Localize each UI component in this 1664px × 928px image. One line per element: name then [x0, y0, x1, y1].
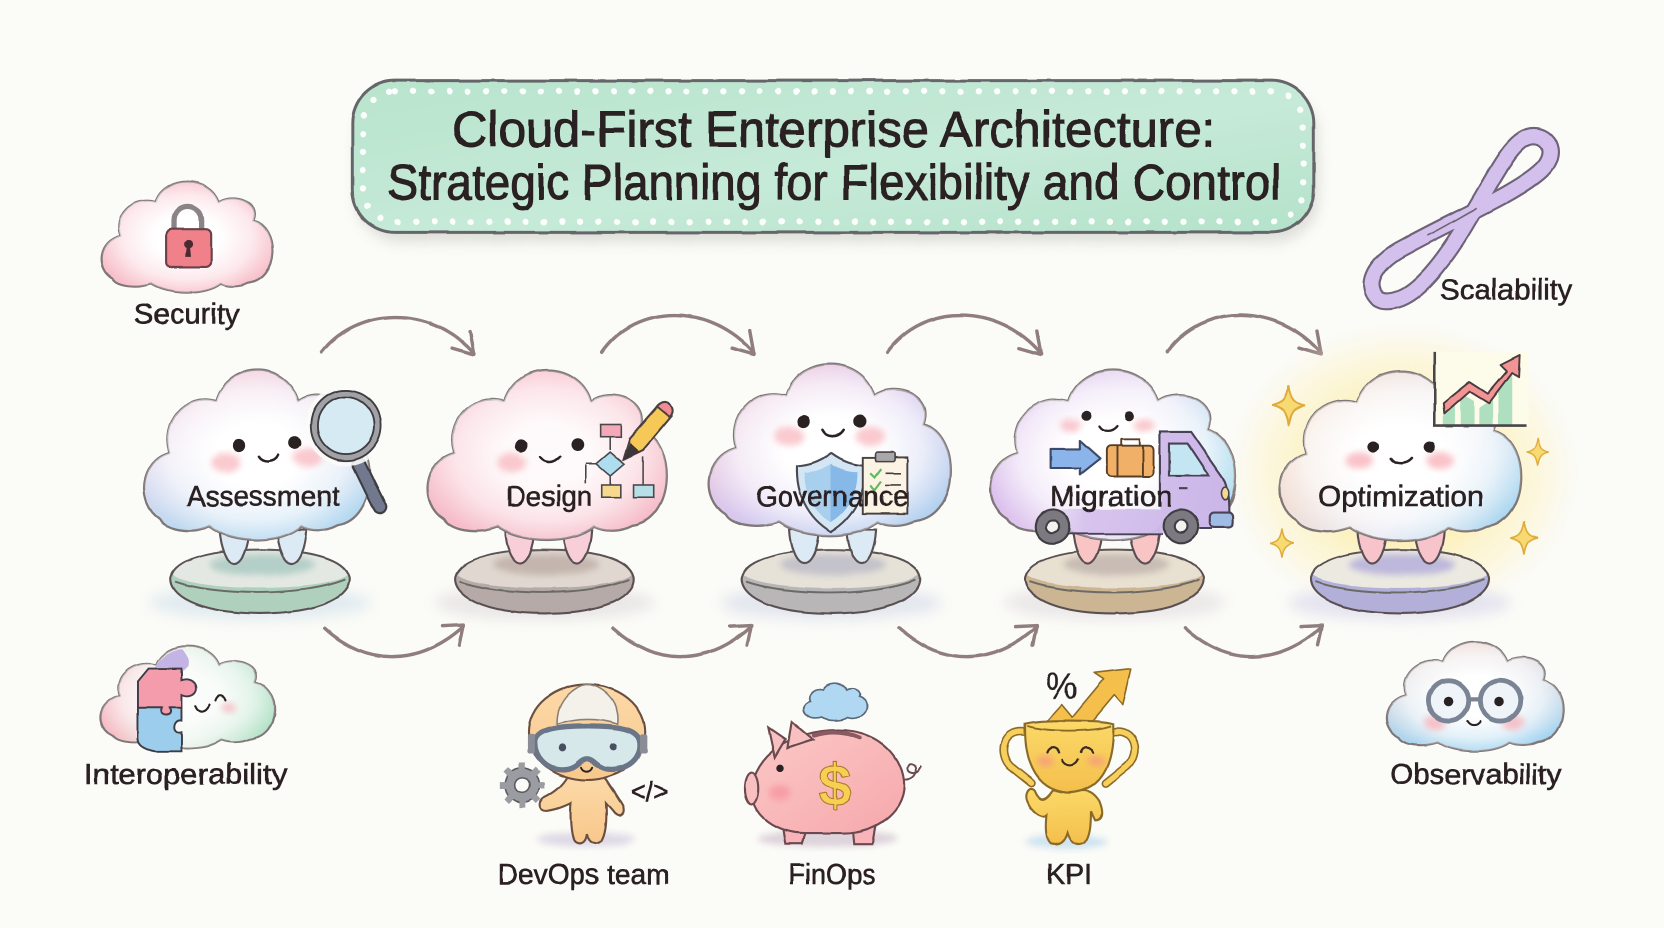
coin slot	[814, 732, 860, 738]
pink puzzle piece	[138, 669, 196, 715]
dollar sign: $	[819, 751, 852, 818]
title text: Cloud-First Enterprise Architecture:	[452, 101, 1215, 157]
icon: truck	[1036, 432, 1233, 543]
pig body	[751, 730, 904, 833]
icon: blue arrow	[1051, 440, 1100, 474]
blue puzzle piece	[138, 708, 181, 751]
code symbol: </>	[630, 776, 669, 807]
snout	[744, 773, 758, 804]
label: kpi: KPI	[1046, 859, 1092, 891]
arrow: top migration to optimization	[1167, 315, 1321, 354]
cloud body	[709, 364, 951, 536]
scalability band	[1372, 136, 1573, 306]
ears	[768, 728, 785, 758]
arrow: bottom design to governance	[613, 625, 751, 657]
subtitle text: Strategic Planning for Flexibility and Control	[387, 155, 1281, 211]
cloud body	[990, 370, 1235, 540]
label: governance: Governance	[756, 481, 908, 513]
label: design: Design	[506, 481, 592, 513]
cloud body	[1280, 371, 1521, 541]
observability cloud	[1386, 642, 1563, 791]
platform	[434, 550, 655, 620]
arrow: bottom migration to optimization	[1185, 625, 1322, 657]
arrow: top design to governance	[602, 315, 755, 354]
icon: magnifying glass	[306, 385, 386, 507]
step: design	[428, 370, 673, 620]
step: migration	[990, 370, 1235, 620]
label: devops team: DevOps team	[498, 859, 670, 891]
icon: suitcase	[1107, 439, 1154, 476]
pink cloud bump	[1184, 447, 1235, 519]
cloud body	[428, 370, 667, 540]
devops character	[498, 684, 670, 891]
head	[528, 684, 645, 780]
security cloud	[101, 182, 273, 331]
icon: padlock	[167, 206, 211, 267]
face	[1346, 441, 1454, 469]
face	[1037, 748, 1105, 766]
platform	[721, 550, 941, 620]
tail	[900, 764, 921, 780]
body	[540, 775, 624, 843]
glow	[1228, 324, 1578, 621]
interoperability cloud	[84, 646, 288, 791]
finops piggy bank	[744, 683, 921, 891]
label: optimization: Optimization	[1318, 481, 1484, 513]
goggles	[535, 726, 640, 769]
platform	[1004, 550, 1225, 620]
cup	[1025, 721, 1113, 793]
label: migration: Migration	[1050, 481, 1173, 513]
label: scalability: Scalability	[1440, 274, 1573, 306]
gear	[500, 763, 544, 808]
icon: shield	[797, 453, 865, 532]
label: security: Security	[134, 299, 241, 331]
icon: glasses and face	[1424, 680, 1524, 730]
icon: sparkles	[1270, 385, 1549, 558]
face	[497, 438, 585, 472]
kpi trophy	[1004, 665, 1135, 891]
platform	[150, 550, 370, 620]
icon: growth chart	[1435, 352, 1528, 427]
purple puzzle piece	[155, 649, 189, 671]
small cloud	[803, 683, 867, 721]
face	[775, 415, 885, 446]
icon: pencil	[623, 402, 673, 460]
icon: clipboard	[863, 452, 907, 514]
arrow: top governance to migration	[887, 315, 1041, 354]
label: interoperability: Interoperability	[84, 759, 288, 791]
platform	[1289, 550, 1510, 620]
step: optimization	[1228, 324, 1578, 621]
body	[1026, 789, 1102, 844]
label: observability: Observability	[1390, 759, 1562, 791]
handles	[1004, 732, 1135, 783]
label: assessment: Assessment	[187, 481, 340, 513]
cloud body	[144, 370, 370, 540]
face	[195, 696, 236, 713]
arrow: bottom assessment to design	[325, 625, 464, 657]
arrow: top assessment to design	[322, 317, 474, 354]
icon: flowchart	[586, 424, 654, 498]
face	[211, 436, 323, 472]
step: governance	[709, 364, 951, 620]
label: finops: FinOps	[788, 859, 876, 891]
legs	[780, 807, 879, 844]
step: assessment	[144, 370, 386, 620]
face	[1060, 411, 1155, 432]
hard hat	[557, 684, 618, 724]
growth arrow	[1042, 669, 1131, 741]
percent symbol: %	[1046, 665, 1077, 706]
title banner	[352, 81, 1318, 242]
arrow: bottom governance to migration	[900, 625, 1037, 657]
